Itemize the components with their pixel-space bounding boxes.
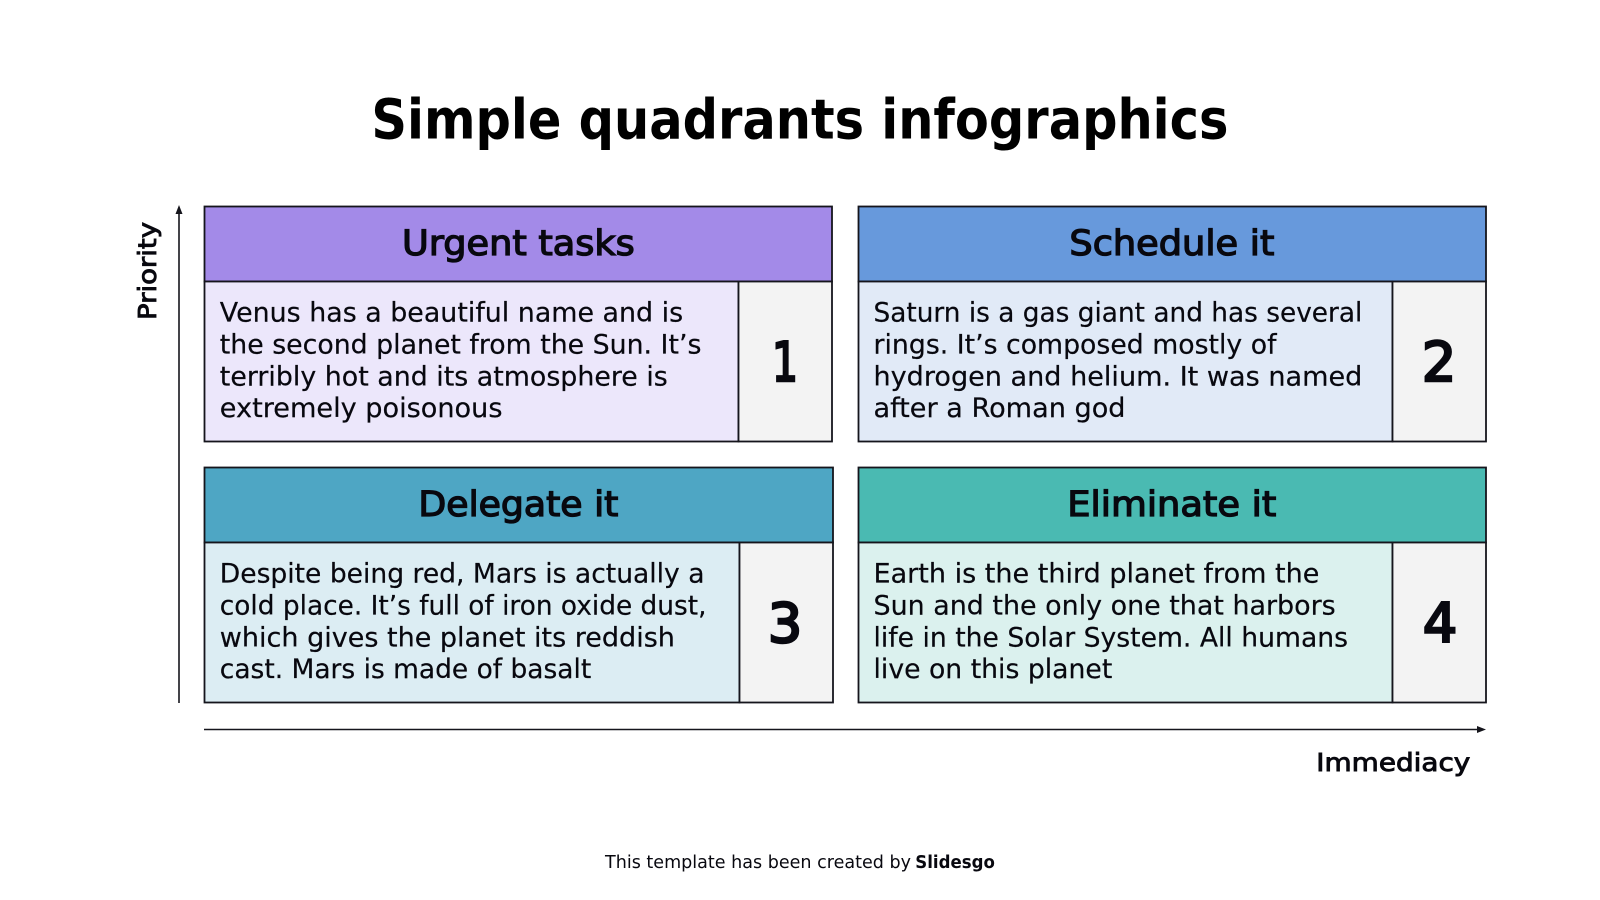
text block: saturn: Saturn is a gas giant and has several <box>874 298 1362 328</box>
text block: venus <box>220 298 701 424</box>
heading: delegate it: Delegate it <box>418 485 618 525</box>
panel: urgent tasks <box>204 206 832 442</box>
text block: venus: extremely poisonous <box>220 393 503 424</box>
heading: schedule it: Schedule it <box>1069 224 1274 264</box>
text block: mars <box>220 559 707 685</box>
panel: delegate it <box>204 468 833 702</box>
text block: saturn <box>874 298 1362 424</box>
text block: earth: Sun and the only one that harbors <box>874 591 1336 622</box>
text block: mars: which gives the planet its reddish <box>220 623 675 654</box>
text block: venus: terribly hot and its atmosphere is <box>220 362 668 392</box>
number 4: 4 <box>1423 592 1457 655</box>
heading: urgent tasks: Urgent tasks <box>402 224 635 264</box>
x axis: immediacy <box>204 726 1486 777</box>
number 2: 2 <box>1422 331 1456 394</box>
footer credit: Slidesgo <box>915 852 995 873</box>
label: immediacy: Immediacy <box>1316 748 1471 777</box>
text block: saturn: rings. It’s composed mostly of <box>874 330 1277 360</box>
text block: mars: cast. Mars is made of basalt <box>220 654 591 685</box>
text block: venus: Venus has a beautiful name and is <box>220 298 683 328</box>
text block: saturn: hydrogen and helium. It was named <box>874 362 1362 392</box>
text block: saturn: after a Roman god <box>874 393 1126 424</box>
arrow: priority axis <box>176 205 182 703</box>
number 3: 3 <box>768 592 802 655</box>
text block: earth: life in the Solar System. All humans <box>874 623 1348 654</box>
text block: earth: live on this planet <box>874 654 1112 685</box>
text block: mars: cold place. It’s full of iron oxide dust, <box>220 591 707 622</box>
label: priority: Priority <box>133 222 162 320</box>
y axis: priority <box>133 205 182 703</box>
number 1: 1 <box>772 331 798 394</box>
text block: earth: Earth is the third planet from the <box>874 559 1319 590</box>
panel: schedule it <box>858 206 1486 442</box>
arrow: immediacy axis <box>204 726 1486 733</box>
text block: mars: Despite being red, Mars is actually a <box>220 559 705 590</box>
panel: eliminate it <box>858 468 1486 702</box>
text block: earth <box>874 559 1348 685</box>
text block: venus: the second planet from the Sun. It’s <box>220 330 701 360</box>
footer credit: This template has been created by <box>604 852 911 873</box>
heading: eliminate it: Eliminate it <box>1067 485 1276 525</box>
title: Simple quadrants infographics <box>371 88 1228 152</box>
